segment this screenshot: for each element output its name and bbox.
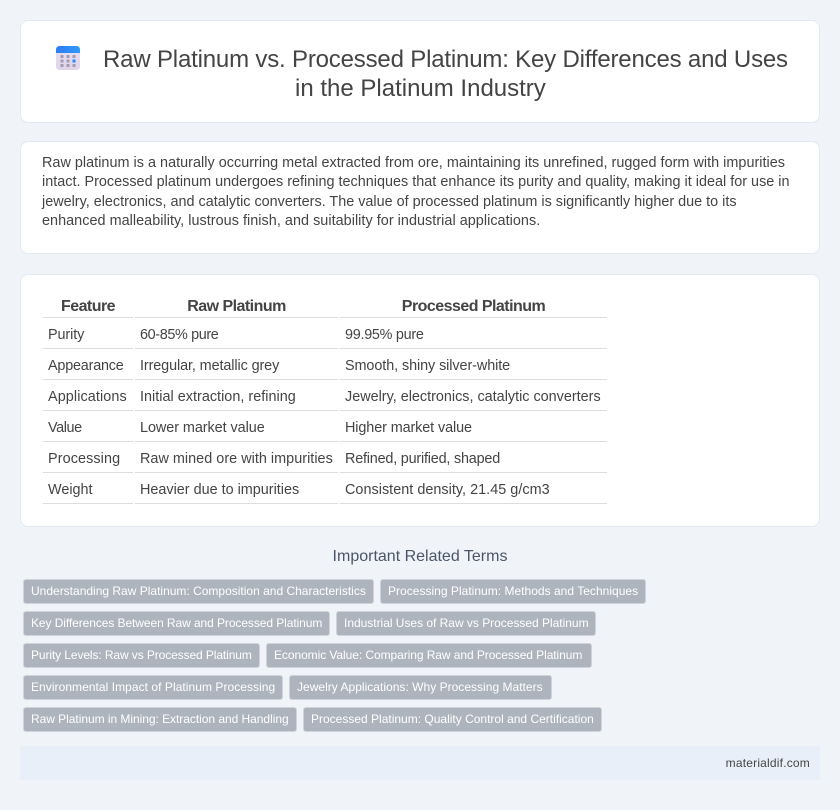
tag [23, 675, 283, 700]
tag: Economic Value: Comparing Raw and Processed Platinum [274, 648, 582, 662]
tag: Key Differences Between Raw and Processed Platinum [31, 616, 322, 630]
row: appearance: Smooth, shiny silver-white [345, 358, 510, 374]
row: weight: Heavier due to impurities [140, 482, 299, 498]
row: value: Higher market value [345, 420, 472, 436]
table header: Processed Platinum [402, 298, 545, 315]
tag [380, 579, 646, 604]
title: Raw Platinum vs. Processed Platinum: Key Differences and Uses [103, 46, 788, 73]
tag [336, 611, 596, 636]
table header: Feature [61, 298, 115, 315]
related term tags [23, 579, 646, 732]
row: purity [48, 327, 424, 343]
row: value: Lower market value [140, 420, 265, 436]
row: purity: Purity [48, 327, 84, 343]
row: purity: 99.95% pure [345, 327, 424, 343]
tag: Raw Platinum in Mining: Extraction and Handling [31, 712, 289, 726]
tag [23, 611, 330, 636]
tag: Environmental Impact of Platinum Processing [31, 680, 275, 694]
heading: related terms: Important Related Terms [333, 548, 507, 565]
row: applications: Initial extraction, refining [140, 389, 296, 405]
row: processing: Raw mined ore with impurities [140, 451, 333, 467]
row: applications: Jewelry, electronics, catalytic converters [345, 389, 601, 405]
footer source text: materialdif.com [726, 756, 810, 770]
row: value: Value [48, 420, 82, 436]
intro text: Raw platinum is a naturally occurring metal extracted from ore, maintaining its unrefined, rugged form with impurities [42, 155, 785, 171]
tag: Understanding Raw Platinum: Composition and Characteristics [31, 584, 366, 598]
comparison table [43, 298, 607, 504]
intro text: enhanced malleability, lustrous finish, and suitability for industrial applications. [42, 213, 540, 229]
panel: comparison table [20, 274, 820, 527]
tag: Purity Levels: Raw vs Processed Platinum [31, 648, 252, 662]
footer [20, 746, 820, 780]
intro text: jewelry, electronics, and catalytic converters. The value of processed platinum is significantly higher due to its [42, 194, 737, 210]
tag: Processed Platinum: Quality Control and Certification [311, 712, 594, 726]
tag: Industrial Uses of Raw vs Processed Platinum [344, 616, 589, 630]
row: processing: Refined, purified, shaped [345, 451, 500, 467]
row: applications: Applications [48, 389, 127, 405]
tag [303, 707, 602, 732]
row: weight: Weight [48, 482, 93, 498]
tag [23, 707, 297, 732]
table header: Raw Platinum [187, 298, 286, 315]
row: processing [48, 451, 500, 467]
panel: introduction [20, 141, 820, 254]
tag [289, 675, 552, 700]
panel: title header [20, 20, 820, 123]
tag: Processing Platinum: Methods and Techniques [388, 584, 638, 598]
tag [23, 579, 374, 604]
tag [266, 643, 592, 668]
row: weight [48, 482, 550, 498]
row: applications [48, 389, 601, 405]
tag [23, 643, 260, 668]
title: in the Platinum Industry [295, 75, 546, 102]
row: purity: 60-85% pure [140, 327, 218, 343]
row: appearance [48, 358, 510, 374]
table header [61, 298, 545, 315]
title [103, 46, 788, 102]
tag: Jewelry Applications: Why Processing Matters [297, 680, 543, 694]
intro text [42, 155, 790, 229]
row: weight: Consistent density, 21.45 g/cm3 [345, 482, 550, 498]
row: appearance: Appearance [48, 358, 124, 374]
intro text: intact. Processed platinum undergoes refining techniques that enhance its purity and quality, making it ideal for use in [42, 174, 790, 190]
row: appearance: Irregular, metallic grey [140, 358, 279, 374]
icon: calendar [56, 46, 80, 70]
row: processing: Processing [48, 451, 120, 467]
row: value [48, 420, 472, 436]
